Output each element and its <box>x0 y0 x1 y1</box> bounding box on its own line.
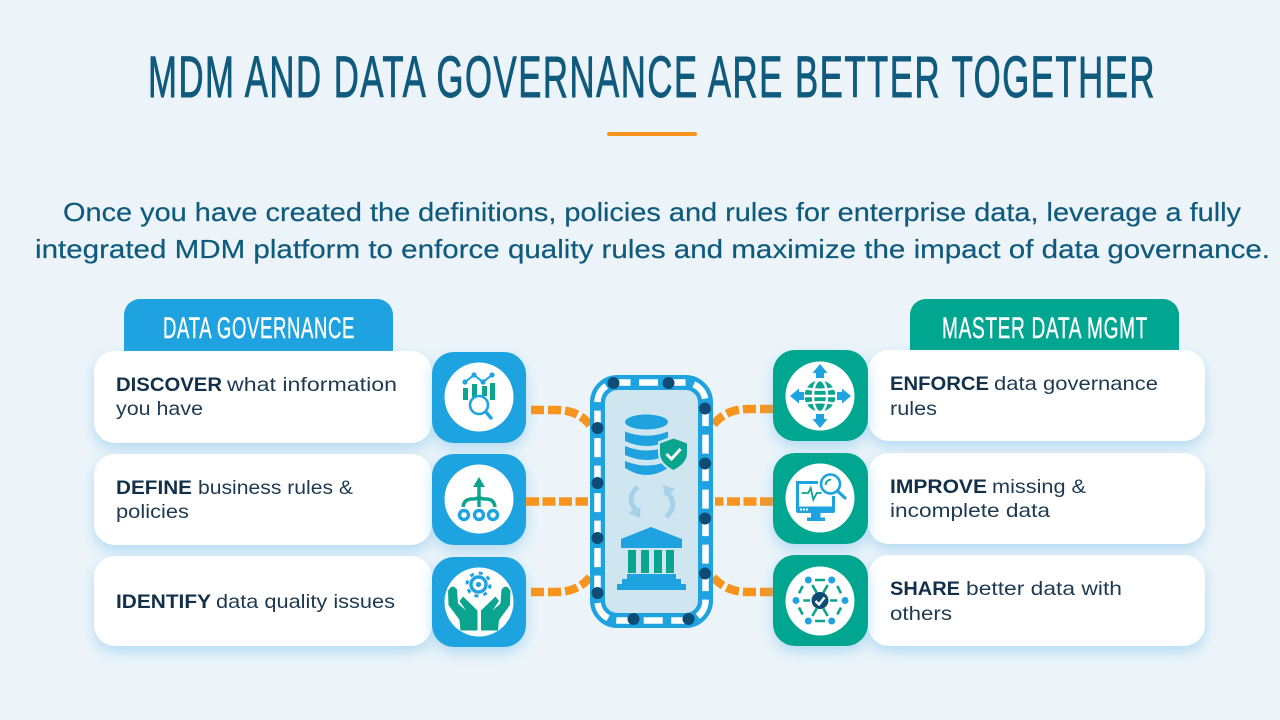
card: share <box>868 555 1205 646</box>
intro paragraph: integrated MDM platform to enforce quality rules and maximize the impact of data governance. <box>35 234 1270 264</box>
card: discover: what information <box>226 374 397 396</box>
connectors: right dashed lines <box>713 409 773 592</box>
icon: improve monitor and magnifier <box>773 453 868 544</box>
card: enforce: data governance <box>994 373 1158 395</box>
card: discover: DISCOVER <box>116 374 222 396</box>
icon: share network <box>773 555 868 646</box>
card: define: policies <box>116 501 189 523</box>
card: improve: incomplete data <box>890 500 1050 522</box>
card: define: business rules & <box>198 477 353 499</box>
intro paragraph <box>35 197 1270 264</box>
heading tab: data governance <box>124 299 393 352</box>
card: identify: IDENTIFY <box>116 591 211 613</box>
panel: master data mgmt <box>773 299 1205 646</box>
icon: institution building <box>617 527 686 590</box>
frame dots <box>592 377 711 625</box>
icon: identify hands and gear <box>432 557 526 647</box>
title underline <box>607 132 697 136</box>
card: improve: missing & <box>992 476 1086 498</box>
card: enforce: rules <box>890 398 937 420</box>
platform frame <box>598 382 706 620</box>
heading tab: master data mgmt <box>910 299 1179 352</box>
panel: data governance <box>94 299 526 647</box>
intro paragraph: Once you have created the definitions, policies and rules for enterprise data, leverage a fully <box>63 197 1241 227</box>
icon: sync arrows <box>628 485 675 518</box>
card: discover <box>94 351 432 443</box>
heading tab: master data mgmt: MASTER DATA MGMT <box>942 312 1148 345</box>
card: identify: data quality issues <box>216 591 395 613</box>
icon: database <box>625 414 668 475</box>
card: share: SHARE <box>890 578 960 600</box>
card: improve: IMPROVE <box>890 476 987 498</box>
icon: shield check <box>658 436 690 472</box>
icon: discover chart and magnifier <box>432 352 526 443</box>
card: define: DEFINE <box>116 477 192 499</box>
card: improve <box>868 453 1205 544</box>
card: identify <box>94 556 432 646</box>
card: share: better data with <box>966 578 1122 600</box>
card: enforce <box>868 350 1205 441</box>
card: share: others <box>890 603 952 625</box>
card: discover: you have <box>116 398 203 420</box>
heading tab: data governance: DATA GOVERNANCE <box>163 312 355 345</box>
central platform graphic <box>592 377 711 625</box>
card: enforce: ENFORCE <box>890 373 989 395</box>
connectors: left dashed lines <box>526 410 590 592</box>
icon: enforce globe with arrows <box>773 350 868 441</box>
card: define <box>94 454 432 545</box>
icon: define merging arrow <box>432 454 526 545</box>
